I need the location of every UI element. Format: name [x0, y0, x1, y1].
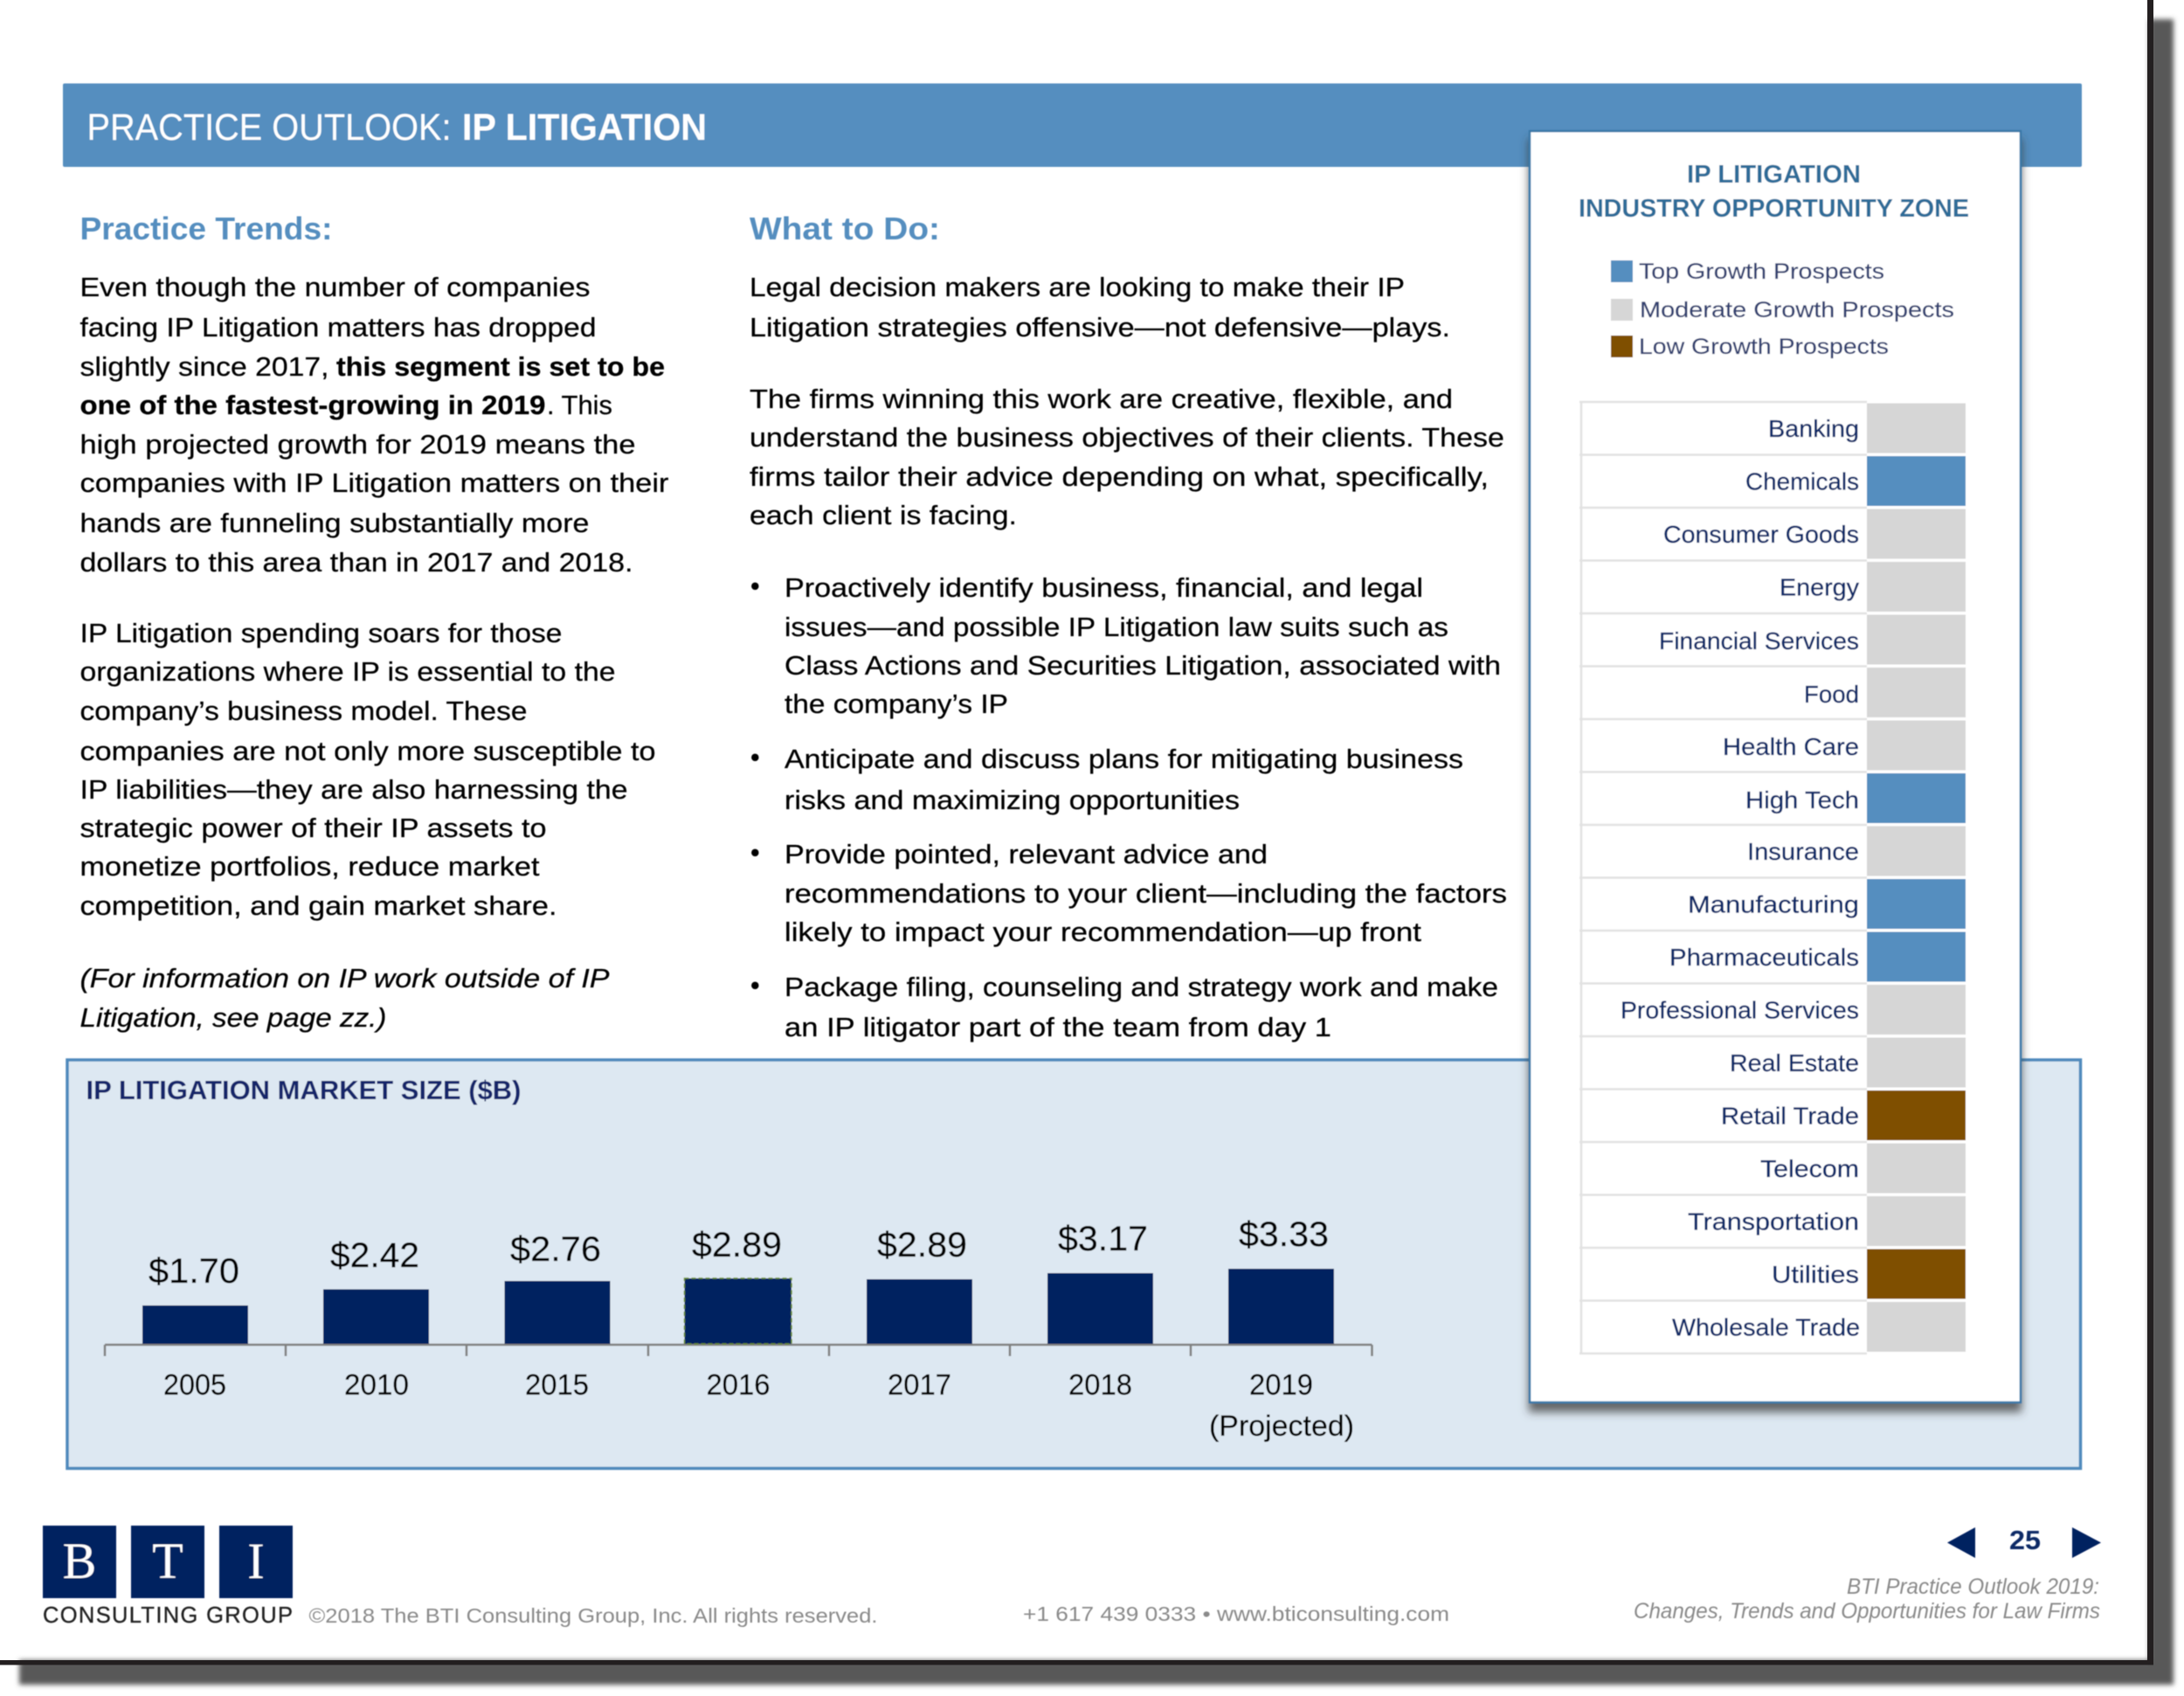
bullet 1: Proactively identify business, financial, and legal	[784, 573, 1423, 603]
bar chart: market size by year	[105, 1215, 1372, 1442]
value labels: $2.89	[692, 1226, 782, 1264]
industry labels: Health Care	[1723, 733, 1859, 760]
industry labels: Energy	[1780, 573, 1859, 601]
bullet 2	[750, 743, 1463, 815]
value labels: $3.33	[1239, 1215, 1329, 1254]
icon: previous page arrow	[1947, 1527, 1975, 1558]
footer: publication title	[1634, 1575, 2100, 1623]
text block: practice trends paragraph 2: IP liabilities—they are also harnessing the	[80, 775, 627, 805]
text block: what to do intro: Legal decision makers are looking to make their IP	[750, 273, 1405, 302]
logo: BTI Consulting Group: I	[247, 1533, 265, 1589]
text block: practice trends paragraph 1: companies with IP Litigation matters on their	[80, 468, 669, 498]
text block: practice trends paragraph 2: strategic power of their IP assets to	[80, 813, 547, 843]
industry labels: Real Estate	[1730, 1049, 1859, 1076]
bullet 3	[750, 838, 1507, 947]
bullet 3: Provide pointed, relevant advice and	[784, 840, 1268, 869]
bullet 1: issues—and possible IP Litigation law suits such as	[784, 613, 1448, 642]
legend: Top Growth Prospects	[1639, 260, 1884, 284]
value labels: $2.89	[877, 1226, 967, 1264]
bullet 1	[750, 571, 1501, 719]
logo: BTI Consulting Group: CONSULTING GROUP	[43, 1603, 293, 1628]
text block: practice trends paragraph 1	[80, 273, 669, 578]
footer: publication title: Changes, Trends and Opportunities for Law Firms	[1634, 1599, 2100, 1623]
bullet 3: likely to impact your recommendation—up front	[784, 917, 1422, 947]
bullet 4: •	[750, 971, 760, 1000]
axis	[105, 1345, 1372, 1356]
text block: winning firms paragraph: The firms winning this work are creative, flexible, and	[750, 384, 1453, 414]
text block: winning firms paragraph: firms tailor their advice depending on what, specifically,	[750, 462, 1489, 492]
value labels: $1.70	[149, 1252, 239, 1291]
text block: practice trends paragraph 1: slightly since 2017,	[80, 352, 328, 382]
text block: practice trends paragraph 2: IP Litigation spending soars for those	[80, 619, 563, 648]
footer: copyright: ©2018 The BTI Consulting Group, Inc. All rights reserved.	[309, 1604, 877, 1627]
industry labels: Banking	[1768, 415, 1859, 442]
heading: what to do: What to Do:	[750, 211, 940, 246]
panel: market size chart	[67, 1060, 2081, 1468]
year labels: 2015	[525, 1368, 589, 1401]
text block: practice trends paragraph 1: high projected growth for 2019 means the	[80, 430, 636, 460]
value labels	[149, 1215, 1329, 1291]
text block: what to do intro	[750, 273, 1450, 343]
logo: BTI Consulting Group	[43, 1526, 293, 1628]
year labels: 2017	[888, 1368, 951, 1401]
industry labels: Financial Services	[1659, 627, 1859, 654]
heading: practice trends: Practice Trends:	[80, 211, 332, 246]
header banner	[63, 84, 2082, 167]
industry labels: High Tech	[1745, 786, 1859, 813]
industry labels: Food	[1804, 681, 1859, 708]
industry labels: Pharmaceuticals	[1669, 944, 1859, 971]
industry labels: Transportation	[1688, 1208, 1859, 1236]
year labels: (Projected)	[1209, 1409, 1354, 1442]
bullet list: recommendations	[750, 571, 1507, 1042]
page number: 25	[2009, 1525, 2041, 1555]
text block: practice trends paragraph 2: competition, and gain market share.	[80, 891, 557, 921]
text block: practice trends paragraph 1: one of the fastest-growing in 2019	[80, 391, 545, 420]
text block: practice trends paragraph 2	[80, 619, 655, 921]
year labels: 2019	[1249, 1368, 1313, 1401]
industry labels: Utilities	[1772, 1261, 1859, 1288]
value labels: $3.17	[1058, 1220, 1148, 1258]
text block: practice trends paragraph 1: hands are funneling substantially more	[80, 509, 589, 538]
text block: practice trends paragraph 1: . This	[547, 391, 612, 420]
header title: PRACTICE OUTLOOK:	[87, 107, 451, 149]
text block: cross reference note: (For information on IP work outside of IP	[80, 964, 610, 993]
industry labels: Consumer Goods	[1663, 521, 1859, 548]
bullet 3: recommendations to your client—including the factors	[784, 879, 1507, 909]
text block: winning firms paragraph: understand the business objectives of their clients. These	[750, 423, 1504, 453]
year labels: 2016	[706, 1368, 771, 1401]
legend	[1611, 260, 1954, 359]
year labels: 2018	[1068, 1368, 1132, 1401]
bullet 2: Anticipate and discuss plans for mitigating business	[784, 744, 1463, 774]
logo: BTI Consulting Group: T	[152, 1533, 183, 1589]
year labels: 2005	[163, 1368, 226, 1401]
year labels	[163, 1368, 1354, 1442]
footer: contact details: +1 617 439 0333 • www.bticonsulting.com	[1023, 1603, 1449, 1625]
text block: practice trends paragraph 1: Even though the number of companies	[80, 273, 591, 302]
text block: practice trends paragraph 1: facing IP Litigation matters has dropped	[80, 313, 597, 343]
value labels: $2.42	[330, 1236, 419, 1275]
text block: practice trends paragraph 2: monetize portfolios, reduce market	[80, 852, 540, 882]
text block: cross reference note: Litigation, see page zz.)	[80, 1003, 386, 1033]
bullet 1: the company’s IP	[784, 689, 1008, 719]
text block: practice trends paragraph 1: dollars to this area than in 2017 and 2018.	[80, 548, 632, 578]
text block: cross reference note	[80, 964, 610, 1033]
industry labels: Retail Trade	[1721, 1103, 1859, 1129]
panel title	[1579, 161, 1969, 223]
text block: practice trends paragraph 1: this segment is set to be	[336, 352, 665, 382]
footer: publication title: BTI Practice Outlook 2019:	[1847, 1575, 2099, 1599]
legend: Low Growth Prospects	[1639, 335, 1889, 359]
chart title: IP LITIGATION MARKET SIZE ($B)	[86, 1075, 521, 1105]
industry labels: Manufacturing	[1688, 891, 1859, 917]
bullet 4: Package filing, counseling and strategy work and make	[784, 973, 1498, 1002]
industry table	[1579, 401, 1966, 1353]
industry labels: Wholesale Trade	[1672, 1314, 1860, 1340]
rating swatches	[1867, 404, 1966, 1352]
bullet 1: •	[750, 571, 760, 601]
year labels: 2010	[344, 1368, 409, 1401]
panel title: IP LITIGATION	[1687, 161, 1861, 189]
value labels: $2.76	[510, 1230, 601, 1269]
bullet 2: •	[750, 743, 760, 772]
bullet 4: an IP litigator part of the team from day 1	[784, 1013, 1331, 1042]
logo: BTI Consulting Group: B	[63, 1533, 96, 1589]
legend: Moderate Growth Prospects	[1640, 298, 1954, 322]
header title bold part: IP LITIGATION	[462, 107, 707, 149]
panel: industry opportunity zone	[1530, 131, 2021, 1402]
text block: what to do intro: Litigation strategies offensive—not defensive—plays.	[750, 313, 1450, 343]
industry labels: Professional Services	[1621, 996, 1859, 1024]
text block: practice trends paragraph 2: organizations where IP is essential to the	[80, 657, 615, 687]
industry labels: Telecom	[1760, 1155, 1859, 1182]
industry labels: Chemicals	[1745, 468, 1859, 495]
text block: practice trends paragraph 2: company’s business model. These	[80, 696, 528, 726]
bullet 3: •	[750, 838, 760, 868]
industry labels	[1621, 415, 1860, 1340]
bullet 4	[750, 971, 1498, 1042]
bullet 2: risks and maximizing opportunities	[784, 786, 1240, 815]
text block: winning firms paragraph: each client is facing.	[750, 501, 1017, 530]
icon: next page arrow	[2072, 1527, 2101, 1558]
text block: practice trends paragraph 2: companies are not only more susceptible to	[80, 737, 655, 766]
text block: winning firms paragraph	[750, 384, 1504, 530]
panel title: INDUSTRY OPPORTUNITY ZONE	[1579, 195, 1969, 223]
bullet 1: Class Actions and Securities Litigation, associated with	[784, 651, 1501, 681]
industry labels: Insurance	[1747, 838, 1859, 865]
bars	[142, 1269, 1334, 1344]
